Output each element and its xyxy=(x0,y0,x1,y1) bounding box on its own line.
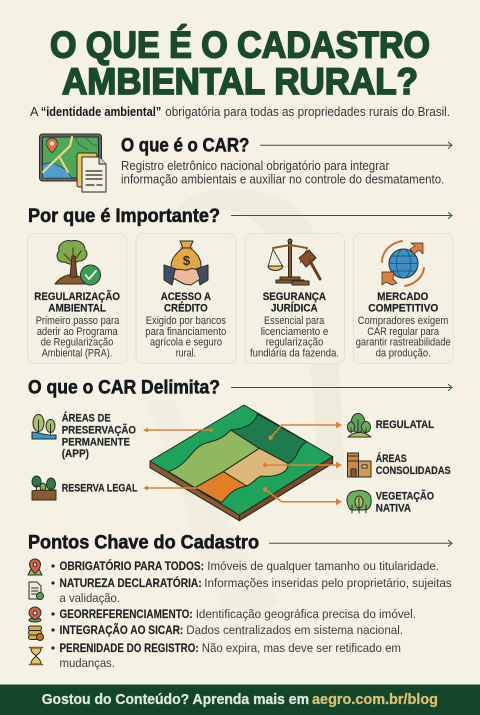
card title: ACESSO A xyxy=(161,291,211,303)
list item: georreferenciamento: GEORREFERENCIAMENTO: xyxy=(60,607,193,621)
list item: integração ao SICAR xyxy=(51,622,403,637)
list item: natureza declaratória xyxy=(51,575,452,605)
icon: APP trees and water xyxy=(32,414,56,439)
label: APP xyxy=(62,412,136,460)
icon: tree with check xyxy=(55,240,100,285)
card text: Ambiental (PRA). xyxy=(42,347,112,359)
heading: O que é o CAR: O que é o CAR? xyxy=(121,136,249,156)
card title xyxy=(34,290,120,315)
icon: location pin xyxy=(29,607,41,622)
subtitle: obrigatória para todas as propriedades rurais do Brasil. xyxy=(165,104,450,119)
label: APP: PERMANENTE xyxy=(62,436,130,448)
icon: vegetação nativa xyxy=(347,490,371,513)
card text: aderir ao Programa xyxy=(37,326,118,338)
panel: segurança jurídica xyxy=(245,234,344,364)
subtitle: A xyxy=(30,104,39,119)
heading: O que o CAR Delimita: O que o CAR Delimita? xyxy=(28,378,220,398)
list item: obrigatório: Imóveis de qualquer tamanho ou titularidade. xyxy=(207,559,439,573)
card title: JURÍDICA xyxy=(271,302,318,315)
label: APP: ÁREAS DE xyxy=(62,412,111,425)
icon: regulatal xyxy=(348,414,371,437)
title: O QUE É O CADASTRO xyxy=(50,24,430,66)
list item: natureza declaratória: Informações inseridas pelo proprietário, sujeitas xyxy=(204,576,452,590)
subtitle: “identidade ambiental” xyxy=(41,104,161,119)
label: áreas consolidadas: CONSOLIDADAS xyxy=(376,465,451,477)
panel: mercado competitivo xyxy=(354,234,453,364)
text block: definition: Registro eletrônico nacional obrigatório para integrar xyxy=(121,158,390,173)
card text: rural. xyxy=(176,347,196,359)
label: vegetação nativa xyxy=(376,489,434,515)
isometric land map xyxy=(150,405,333,521)
card text xyxy=(356,315,451,359)
footer xyxy=(0,684,480,715)
icon: document check xyxy=(29,582,44,600)
icon: áreas consolidadas xyxy=(348,453,371,477)
card text xyxy=(145,315,226,359)
card title: AMBIENTAL xyxy=(48,303,106,315)
card text: Essencial para xyxy=(264,315,325,327)
card text: para financiamento xyxy=(145,326,226,338)
heading: Pontos Chave do Cadastro: Pontos Chave do Cadastro xyxy=(28,532,259,554)
list item: perenidade xyxy=(51,641,401,670)
footer: Gostou do Conteúdo? Aprenda mais em xyxy=(42,692,309,708)
card title: SEGURANÇA xyxy=(263,291,326,303)
arrow xyxy=(231,212,452,219)
leader lines xyxy=(143,422,342,505)
card text: de Regularização xyxy=(41,337,113,349)
text block: definition: informação ambientais e auxiliar no controle do desmatamento. xyxy=(121,172,444,186)
list item: georreferenciamento: Identificação geográfica precisa do imóvel. xyxy=(196,607,416,621)
card title xyxy=(263,291,326,315)
subtitle xyxy=(30,104,450,119)
icon: globe and arrows xyxy=(382,241,424,286)
title xyxy=(50,24,430,102)
label: APP: (APP) xyxy=(62,448,89,460)
icon: database coins xyxy=(28,626,44,640)
heading: Por que é Importante: Por que é Importante? xyxy=(28,206,220,227)
card text: regularização xyxy=(266,337,323,349)
card text: agrícola e seguro xyxy=(150,337,222,349)
card title: REGULARIZAÇÃO xyxy=(34,290,120,303)
panel: regularização ambiental xyxy=(28,234,127,364)
card text xyxy=(36,315,120,359)
label: vegetação nativa: NATIVA xyxy=(376,503,411,515)
list item: natureza declaratória: NATUREZA DECLARATÓRIA: xyxy=(60,575,202,590)
card text: da produção. xyxy=(376,347,431,359)
label: áreas consolidadas: ÁREAS xyxy=(376,452,407,465)
list item: perenidade: Não expira, mas deve ser retificado em xyxy=(202,641,401,655)
label: reserva legal: RESERVA LEGAL xyxy=(62,483,138,495)
icon: pin on map xyxy=(28,559,42,575)
label: áreas consolidadas xyxy=(376,452,451,477)
card text: Exigido por bancos xyxy=(146,315,226,327)
list item: perenidade: PERENIDADE DO REGISTRO: xyxy=(60,641,199,655)
list item: perenidade: mudanças. xyxy=(60,656,115,670)
label: regulatal: REGULATAL xyxy=(376,419,434,431)
card title: MERCADO xyxy=(377,291,429,303)
panel: acesso a crédito xyxy=(136,234,236,364)
card title: COMPETITIVO xyxy=(368,303,439,315)
icon: scales and gavel xyxy=(268,239,320,285)
title: AMBIENTAL RURAL? xyxy=(62,61,418,102)
icon: reserva legal xyxy=(32,476,56,500)
icon: money bag and handshake: $ xyxy=(183,253,191,268)
list item: natureza declaratória: a validação. xyxy=(60,591,120,605)
card text: licenciamento e xyxy=(261,326,328,338)
card text: fundiária da fazenda. xyxy=(250,347,339,359)
list item: integração ao SICAR: INTEGRAÇÃO AO SICAR: xyxy=(60,622,183,637)
label: vegetação nativa: VEGETAÇÃO xyxy=(376,489,434,502)
arrow xyxy=(269,540,452,547)
list item: integração ao SICAR: Dados centralizados em sistema nacional. xyxy=(186,623,403,637)
footer: aegro.com.br/blog xyxy=(312,692,438,708)
list item: georreferenciamento xyxy=(51,607,416,621)
label: APP: PRESERVAÇÃO xyxy=(62,424,136,437)
card title: CRÉDITO xyxy=(164,302,208,315)
icon: hourglass xyxy=(30,648,42,664)
card text: Compradores exigem xyxy=(358,315,448,327)
card title xyxy=(368,291,439,315)
card text xyxy=(250,315,339,359)
icon: map and document xyxy=(40,134,106,192)
list item: obrigatório: OBRIGATÓRIO PARA TODOS: xyxy=(60,558,204,573)
card text: garantir rastreabilidade xyxy=(356,337,451,349)
arrow xyxy=(260,142,452,149)
card text: CAR regular para xyxy=(367,326,440,338)
list item: obrigatório xyxy=(51,558,439,573)
text block: definition xyxy=(121,158,444,186)
card title xyxy=(161,291,211,315)
card text: Primeiro passo para xyxy=(36,315,120,327)
arrow xyxy=(231,384,452,391)
